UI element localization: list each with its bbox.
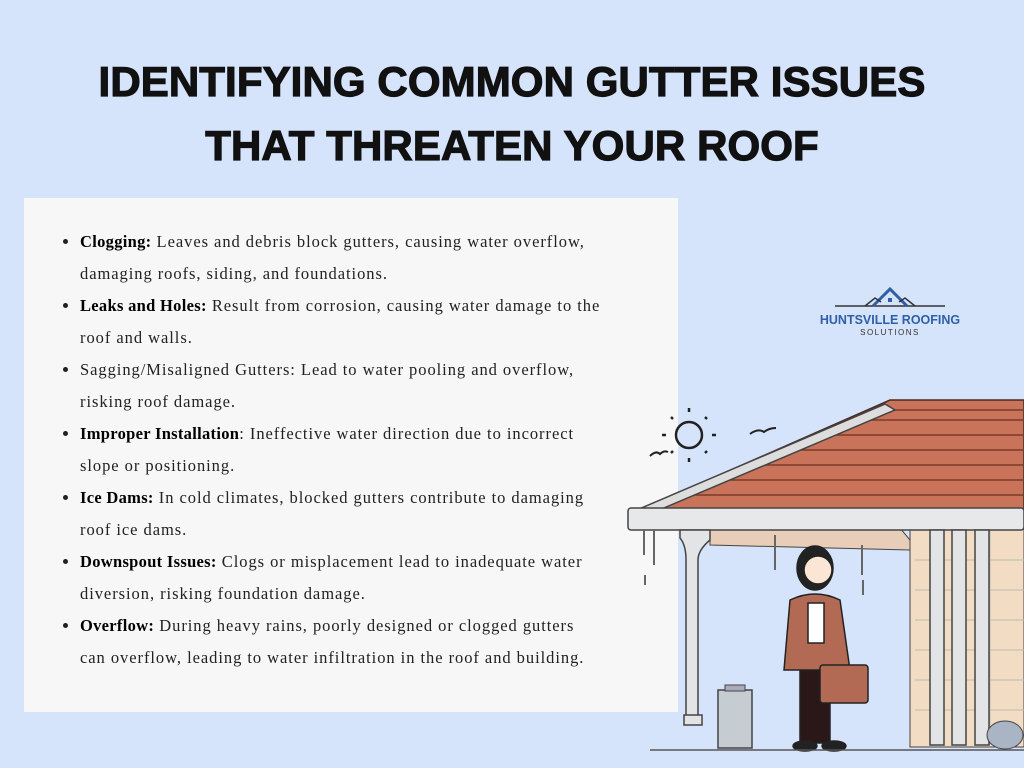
drips	[644, 530, 863, 595]
downspouts	[680, 530, 989, 745]
title: IDENTIFYING COMMON GUTTER ISSUES	[99, 58, 925, 105]
house wall	[910, 525, 1024, 747]
logo: SOLUTIONS	[860, 328, 920, 337]
logo	[820, 287, 960, 337]
roof soffit	[710, 528, 910, 550]
item: sagging: Sagging/Misaligned Gutters: Lead to water pooling and overflow, risking roof damage.	[80, 360, 574, 411]
icon: sun	[662, 408, 716, 462]
icon: birds	[650, 428, 776, 456]
item: clogging: Clogging: Leaves and debris block gutters, causing water overflow, damaging roofs, siding, and foundations.	[80, 232, 585, 283]
gutter	[628, 508, 1024, 530]
bucket	[718, 685, 752, 748]
title: THAT THREATEN YOUR ROOF	[205, 122, 819, 169]
ground	[650, 749, 1024, 751]
item: downspout: Downspout Issues: Clogs or misplacement lead to inadequate water diversion, risking foundation damage.	[80, 552, 583, 603]
item: overflow: Overflow: During heavy rains, poorly designed or clogged gutters can overflow, leading to water infiltration in the roof and building.	[80, 616, 584, 667]
item: installation: Improper Installation: Ineffective water direction due to incorrect slope or positioning.	[80, 424, 574, 475]
title	[99, 58, 925, 169]
roof tiles	[632, 400, 1024, 516]
item: ice dams: Ice Dams: In cold climates, blocked gutters contribute to damaging roof ice dams.	[80, 488, 584, 539]
item: leaks: Leaks and Holes: Result from corrosion, causing water damage to the roof and walls.	[80, 296, 600, 347]
woman	[784, 546, 868, 751]
panel: gutter issues list	[24, 198, 678, 712]
logo: HUNTSVILLE ROOFING	[820, 313, 960, 327]
bird	[987, 721, 1023, 749]
